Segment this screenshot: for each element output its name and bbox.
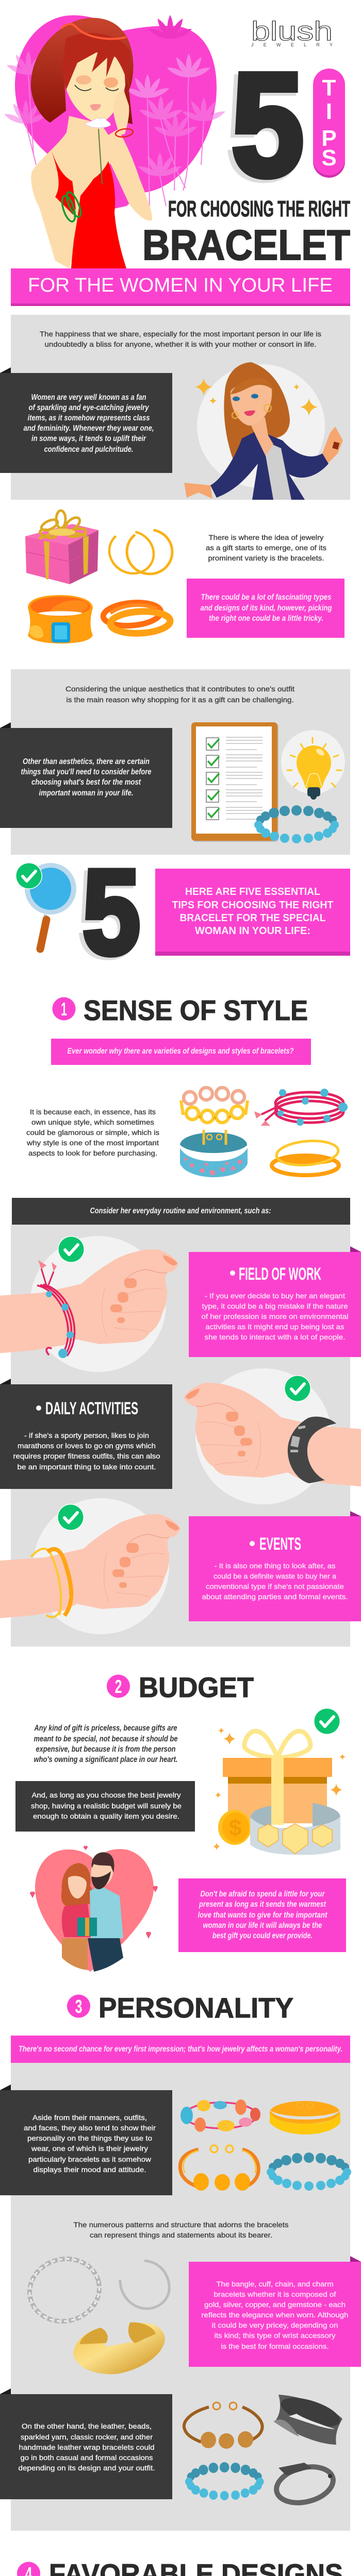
headband xyxy=(61,24,126,39)
red bracelet xyxy=(115,128,134,138)
big number 5: 5 xyxy=(232,43,304,207)
text: jewelry as a gift: prominent variety is the bracelets. xyxy=(208,554,324,562)
icon: gold cuff xyxy=(73,2323,165,2374)
body text: - if she's a sporty person, likes to join xyxy=(24,1431,149,1439)
body text: conventional type if she's not passionate xyxy=(206,1582,344,1590)
intro text: undoubtedly a bliss for anyone, whether it is with your mother or consort in life. xyxy=(44,340,317,348)
body text: of her profession is more on environmental xyxy=(201,1312,349,1320)
heading: 3 personality: 3 xyxy=(75,1996,83,2017)
body text: requires proper fitness outfits, this can also xyxy=(13,1452,160,1460)
text: unique style: aspects to look for before purchasing. xyxy=(28,1149,157,1157)
subtitle banner: FOR THE WOMEN IN YOUR LIFE xyxy=(28,275,333,296)
body skin xyxy=(31,116,152,268)
text: unique style: It is because each, in essence, has its xyxy=(30,1108,156,1116)
icon: blue bead bracelet xyxy=(185,2462,264,2500)
banner: five essential tips: TIPS FOR CHOOSING THE RIGHT xyxy=(172,900,333,911)
icon: check 3 xyxy=(57,1504,84,1531)
man shirt xyxy=(90,1886,123,1938)
body text: she tends to interact with a lot of people. xyxy=(204,1333,346,1341)
text: patterns: The numerous patterns and structure that adorns the bracelets xyxy=(73,2221,289,2229)
heading: 3 personality: PERSONALITY xyxy=(99,1992,293,2024)
text: unique style: own unique style, which sometimes xyxy=(31,1118,154,1126)
bullet title xyxy=(230,1264,321,1284)
panel: personality xyxy=(0,2036,361,2531)
dark callout xyxy=(0,2090,172,2195)
banner: five essential tips xyxy=(155,869,350,956)
callout: don't be afraid xyxy=(178,1878,346,1952)
text: jewelry as a gift xyxy=(206,533,326,562)
text: priceless gift: Any kind of gift is priceless, because gifts are xyxy=(34,1724,177,1733)
big number 5 second: 5 xyxy=(78,847,138,982)
heart xyxy=(35,1849,154,1972)
icon: silver bangle xyxy=(120,2261,169,2309)
gift box xyxy=(228,1777,327,1823)
gemstone cuff xyxy=(251,1803,340,1827)
text: aesthetics: Considering the unique aesthetics that it contributes to one's outfit xyxy=(65,685,294,693)
icon: yellow cuff xyxy=(270,2101,340,2134)
text: jewelry as a gift: There is where the idea of jewelry xyxy=(208,533,324,541)
icon: blue bead bracelet xyxy=(254,805,339,843)
callout: realistic budget: enough to obtain a quality item you desire. xyxy=(33,1812,179,1820)
banner: ever wonder: Ever wonder why there are varieties of designs and styles of bracelets? xyxy=(67,1047,294,1056)
pink callout text: The bangle, cuff, chain, and charm xyxy=(217,2280,333,2288)
text: aesthetics: is the main reason why shopping for it as a gift can be challenging. xyxy=(66,696,294,704)
bullet title xyxy=(250,1534,301,1554)
icon: checklist clipboard xyxy=(191,722,278,842)
dark callout xyxy=(0,728,172,828)
callout text: wear, one of which is their jewelry xyxy=(31,2144,148,2153)
callout text: particularly bracelets as it somehow xyxy=(28,2155,152,2163)
icon: gold bangles xyxy=(272,1139,339,1175)
body text: marathons or loves to go on gyms which xyxy=(18,1442,156,1450)
banner: five essential tips: HERE ARE FIVE ESSENTIAL xyxy=(185,886,320,897)
callout: don't be afraid: Don't be afraid to spend a little for your xyxy=(200,1890,325,1899)
tips pill: T xyxy=(322,75,336,100)
icon: budget gift with coin and cuff: $ xyxy=(229,1816,241,1841)
panel: daily activities xyxy=(0,1379,172,1489)
hair fringe xyxy=(62,33,130,90)
pink callout text: reflects the elegance when worn. Although xyxy=(201,2311,349,2319)
icon: check 1 xyxy=(58,1236,85,1263)
body text: be an important thing to take into count. xyxy=(18,1463,156,1471)
icon: light bulb xyxy=(281,730,345,800)
body text xyxy=(201,1292,349,1341)
icon: pink strap bracelet xyxy=(254,1089,348,1126)
callout text: choosing what's best for the most xyxy=(31,778,141,787)
icon: hand with gold bracelets xyxy=(0,1514,180,1619)
banner: five essential tips: BRACELET FOR THE SPECIAL xyxy=(179,912,326,924)
body text: could be a definite waste to buy her a xyxy=(214,1572,336,1580)
back hair xyxy=(31,18,133,124)
callout text: Aside from their manners, outfits, xyxy=(32,2113,147,2122)
sparkles xyxy=(213,1727,346,1850)
check badge xyxy=(314,1708,340,1735)
heading: 2 budget: BUDGET xyxy=(139,1671,254,1703)
callout text xyxy=(24,393,154,454)
banner: five essential tips: WOMAN IN YOUR LIFE: xyxy=(195,925,310,937)
callout text: items, as it somehow represents class xyxy=(28,414,150,422)
callout: fascinating types: and designs of its kind, however, picking xyxy=(200,604,332,613)
gift bow xyxy=(244,1731,310,1758)
callout: don't be afraid: present as long as it sends the warmest xyxy=(199,1900,326,1909)
bullet title: EVENTS xyxy=(259,1534,301,1554)
icon: pink gift box xyxy=(25,511,99,584)
header bar xyxy=(12,1198,350,1225)
icon: blue bead bracelet xyxy=(267,2153,351,2191)
callout: don't be afraid: love that wants to give for the important xyxy=(198,1911,327,1920)
green bangles xyxy=(59,191,84,223)
callout text xyxy=(21,757,152,798)
intro text: The happiness that we share, especially for the most important person in our life is xyxy=(40,330,321,338)
pink callout text: is the best for formal occasions. xyxy=(221,2342,329,2350)
raised forearm xyxy=(55,134,108,268)
text: unique style: why style is one of the most important xyxy=(26,1139,159,1147)
banner: ever wonder xyxy=(51,1039,311,1065)
callout text: and femininity. Whenever they wear one, xyxy=(24,424,154,433)
text: unique style xyxy=(26,1108,159,1157)
pink callout text: gold, silver, copper, and gemstone - each xyxy=(204,2300,346,2309)
panel: events xyxy=(189,1511,361,1621)
callout text: displays their mood and attitude. xyxy=(33,2165,146,2174)
panel: field of work xyxy=(189,1246,361,1357)
hand on cheek xyxy=(113,90,129,135)
dark callout text: handmade leather wrap bracelets could xyxy=(19,2443,155,2451)
white flower and stem xyxy=(85,118,110,184)
heart dark flower xyxy=(147,15,193,41)
icon: gold hoops xyxy=(102,523,176,582)
dark callout text: sparkled yarn, classic rocker, and other xyxy=(21,2433,153,2441)
heading: 2 budget: 2 xyxy=(114,1676,122,1697)
text: priceless gift: who's owning a significant place in our heart. xyxy=(34,1755,177,1764)
body text: type, it could be a big mistake if the nature xyxy=(202,1302,348,1310)
blush jewelry logo: blush xyxy=(251,16,333,46)
icon: check 2 xyxy=(284,1375,311,1402)
subtitle banner xyxy=(11,268,350,306)
callout: don't be afraid: woman in our life it will always be the xyxy=(203,1921,322,1930)
tips pill: S xyxy=(321,145,337,171)
icon: hand with black band xyxy=(184,1383,361,1487)
pink callout text: bracelets whether it is composed of xyxy=(214,2290,336,2298)
icon: chain bracelet xyxy=(181,1088,248,1123)
icon: gray cuff xyxy=(273,2392,343,2445)
hero illustration: woman with flower in pink heart xyxy=(3,15,226,268)
dark callout text: depending on its design and your outfit. xyxy=(19,2464,155,2472)
text: priceless gift: meant to be special, not because it should be xyxy=(34,1735,178,1743)
fold xyxy=(0,2388,11,2394)
woman hair xyxy=(61,1863,94,1907)
body text: - It is also one thing to look after, as xyxy=(215,1562,335,1570)
callout text: important woman in your life. xyxy=(39,789,133,798)
body text: - If you ever decide to buy her an elegant xyxy=(205,1292,345,1300)
panel: considerations xyxy=(0,669,350,855)
tips pill: I xyxy=(326,99,332,124)
panel: introduction xyxy=(0,315,350,500)
icon: couple in heart xyxy=(30,1846,158,1972)
bullet title xyxy=(36,1399,138,1418)
callout text: Women are very well known as a fan xyxy=(31,393,146,402)
text: unique style: could be glamorous or simple, which is xyxy=(26,1128,159,1137)
callout text: confidence and pulchritude. xyxy=(44,445,133,454)
body text xyxy=(13,1431,160,1471)
man head xyxy=(91,1854,114,1887)
text: patterns xyxy=(73,2221,289,2239)
callout: realistic budget: shop, having a realistic budget will surely be xyxy=(31,1802,182,1810)
icon: hand with pink bracelet xyxy=(0,1249,178,1358)
dark callout xyxy=(0,2394,172,2499)
body text: about attending parties and formal events. xyxy=(202,1592,348,1601)
fold xyxy=(0,722,11,728)
callout text: Other than aesthetics, there are certain xyxy=(23,757,150,766)
icon: glamorous woman xyxy=(184,362,343,500)
callout text: things that you'll need to consider before xyxy=(21,768,152,776)
text: priceless gift: expensive, but because it is from the person xyxy=(36,1745,176,1754)
pink heart backdrop xyxy=(15,15,217,216)
gift held xyxy=(77,1918,97,1936)
closed eyes and lips xyxy=(75,75,119,111)
callout: fascinating types xyxy=(187,579,344,638)
fold xyxy=(0,367,11,373)
woman top xyxy=(62,1904,92,1937)
callout: realistic budget: And, as long as you choose the best jewelry xyxy=(32,1791,180,1799)
bullet title: DAILY ACTIVITIES xyxy=(45,1399,138,1418)
callout text: and faces, they also tend to show their xyxy=(24,2124,156,2132)
text: aesthetics xyxy=(65,685,294,704)
face xyxy=(63,49,125,124)
body text: activities as it might end up being lost as xyxy=(205,1323,344,1331)
callout: realistic budget xyxy=(15,1781,195,1832)
heart flower pattern xyxy=(3,51,226,206)
pink callout xyxy=(189,2262,361,2367)
text: priceless gift xyxy=(34,1724,178,1764)
dark callout text: On the other hand, the leather, beads, xyxy=(22,2422,152,2430)
callout: fascinating types: the right one could be a little tricky. xyxy=(209,614,323,623)
pants xyxy=(62,1938,88,1970)
header text: Consider her everyday routine and environment, such as: xyxy=(90,1207,271,1215)
icon: orange wrap bracelet xyxy=(180,2145,258,2191)
icon: budget gift with coin and cuff xyxy=(213,1708,346,1855)
pink callout text: its kind; this type of wrist accessory xyxy=(215,2331,335,2340)
callout text: personality on the things they use to xyxy=(27,2134,152,2142)
dark callout text xyxy=(19,2422,155,2472)
dark callout xyxy=(0,373,172,473)
icon: magnifier with check xyxy=(15,862,76,951)
dark callout text: go in both casual and formal occasions xyxy=(21,2453,153,2462)
intro text xyxy=(40,330,321,348)
heading: 1 sense of style: 1 xyxy=(61,998,67,1020)
callout text xyxy=(24,2113,156,2174)
text: jewelry as a gift: as a gift starts to emerge, one of its xyxy=(206,544,326,552)
banner xyxy=(11,2036,350,2063)
big number 5 second: 5 xyxy=(83,844,140,979)
pink callout text: it could be very pricey, depending on xyxy=(211,2321,338,2329)
blush jewelry logo: JEWELRY xyxy=(251,42,333,47)
icon: gold cuff with gem xyxy=(28,595,93,643)
callout text: in some ways, it tends to uplift their xyxy=(31,434,146,443)
icon: silver chain xyxy=(23,2251,106,2329)
text: patterns: can represent things and statements about its bearer. xyxy=(90,2231,272,2239)
big number 5: 5 xyxy=(227,46,302,210)
icon: orange double band xyxy=(102,600,171,635)
icon: colourful bead bracelet xyxy=(180,2099,260,2132)
icon: gray strap band xyxy=(273,2461,337,2509)
red dress xyxy=(52,151,126,268)
icon: blue heart cuff xyxy=(180,1130,248,1177)
heading: 1 sense of style: SENSE OF STYLE xyxy=(84,994,308,1026)
callout text: of sparkling and eye-catching jewelry xyxy=(29,403,149,412)
body text xyxy=(202,1562,348,1601)
panel: everyday routine xyxy=(11,1198,350,1647)
coin xyxy=(218,1810,251,1845)
tips pill: P xyxy=(321,126,337,151)
tips pill xyxy=(313,69,345,178)
callout: fascinating types: There could be a lot of fascinating types xyxy=(201,593,332,602)
fold xyxy=(0,2084,11,2090)
icon: leather bracelet xyxy=(184,2402,262,2449)
fold xyxy=(350,2256,361,2262)
callout: don't be afraid: best gift you could ever provide. xyxy=(212,1931,313,1940)
pink callout text xyxy=(201,2280,349,2350)
white circles xyxy=(30,1236,332,1634)
woman face xyxy=(68,1876,87,1899)
